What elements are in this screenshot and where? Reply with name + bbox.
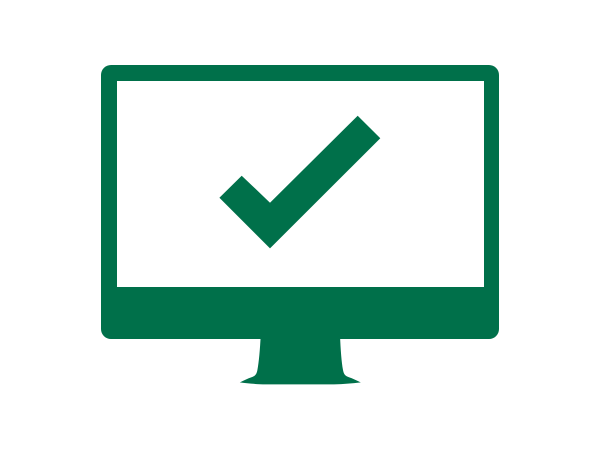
icon: monitor body and screen	[101, 65, 499, 339]
icon: check mark	[219, 116, 380, 248]
icon: monitor stand	[240, 335, 361, 384]
